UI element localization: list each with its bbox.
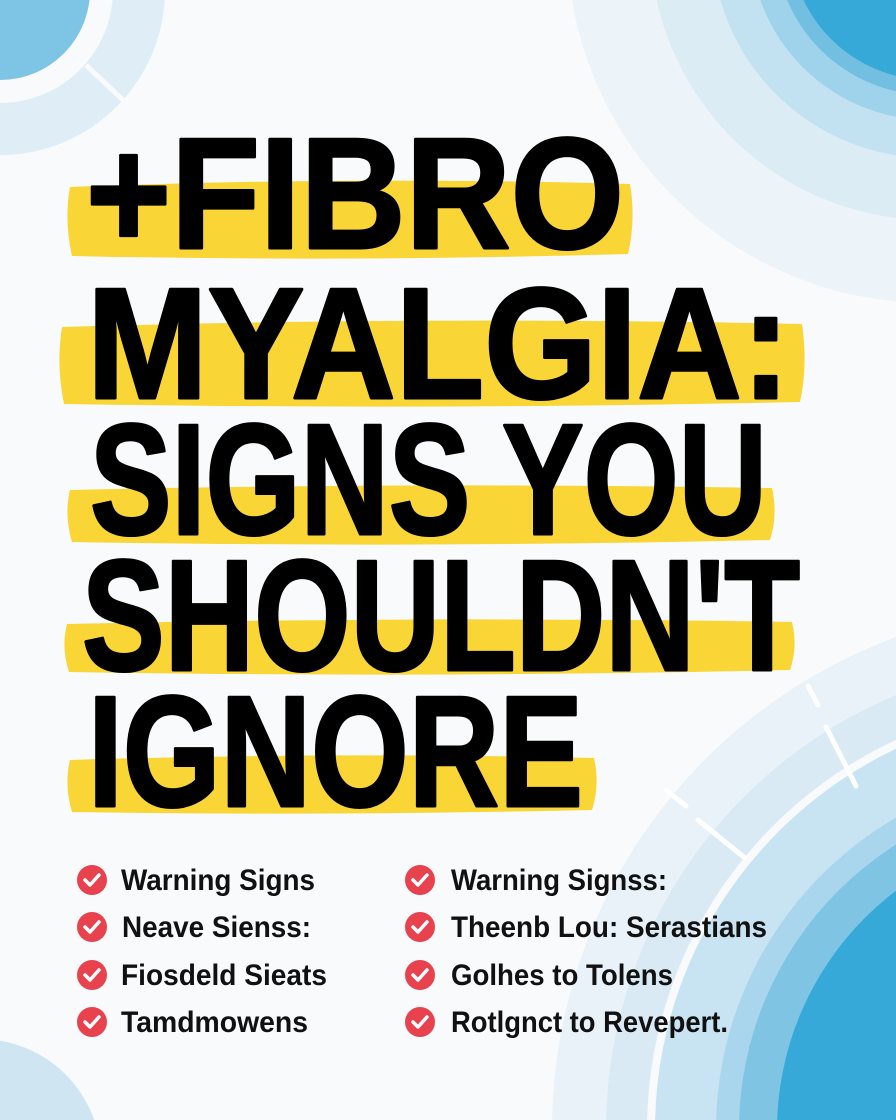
item 1: Warning Signs [121, 864, 315, 897]
decoration: top-left circles [0, 0, 165, 155]
item 3: Fiosdeld Sieats [121, 959, 327, 992]
decoration: bottom-right concentric circles [552, 605, 896, 1120]
item 2: Neave Sienss: [122, 911, 311, 944]
highlight bars [59, 181, 805, 814]
title: +FIBRO [86, 106, 624, 282]
title: IGNORE [88, 664, 583, 840]
decoration: bottom-left circle [0, 1039, 101, 1120]
checklist [77, 864, 767, 1039]
item 6: Theenb Lou: Serastians [451, 911, 767, 944]
title [59, 106, 805, 840]
title: MYALGIA: [87, 256, 790, 432]
item 7: Golhes to Tolens [451, 959, 673, 992]
item 5: Warning Signss: [451, 864, 667, 897]
item 8: Rotlgnct to Revepert. [451, 1006, 728, 1039]
decoration: top-right concentric circles [567, 0, 896, 303]
item 4: Tamdmowens [121, 1006, 308, 1039]
